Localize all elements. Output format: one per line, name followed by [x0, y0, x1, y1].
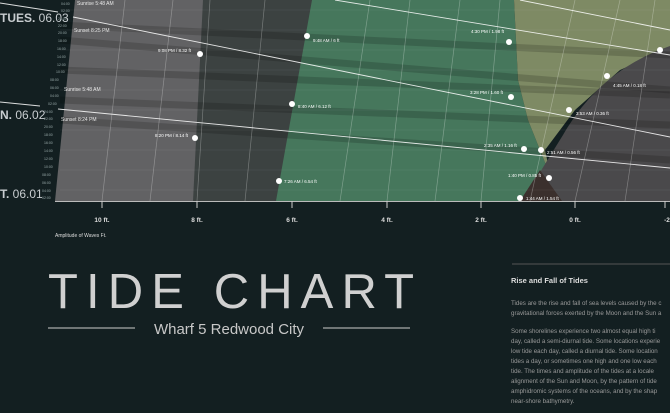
sunrise/sunset labels: Sunrise 5:48 AM — [64, 87, 101, 93]
tide points: 8:40 AM / 6.12 ft — [298, 104, 332, 109]
text panel: rise and fall of tides — [511, 264, 670, 405]
hour labels: 18:00 — [58, 39, 67, 43]
hour labels: 16:00 — [44, 141, 53, 145]
hour labels — [42, 2, 70, 200]
sunrise/sunset labels: Sunrise 5:48 AM — [77, 1, 114, 7]
hour labels: 12:00 — [44, 157, 53, 161]
left date column: N. 06.02 — [0, 108, 46, 122]
hour labels: 12:00 — [57, 63, 66, 67]
tide points — [155, 29, 663, 201]
x axis: -2 — [664, 217, 670, 224]
x axis: 4 ft. — [381, 217, 393, 224]
hour labels: 04:00 — [42, 189, 51, 193]
tide points: 9:08 PM / 8.32 ft — [158, 48, 192, 53]
text panel: rise and fall of tides: tides a day, or sometimes one high and one low each — [511, 358, 657, 365]
left date column: T. 06.01 — [0, 187, 43, 201]
text panel: rise and fall of tides: amphidromic systems of the oceans, and by the shap — [511, 388, 658, 395]
hour labels: 08:00 — [50, 78, 59, 82]
text panel: rise and fall of tides: alignment of the Sun and Moon, by the pattern of tide — [511, 378, 657, 385]
tide points: 1:40 PM / 0.85 ft — [508, 173, 542, 178]
hour labels: 08:00 — [42, 173, 51, 177]
text panel: rise and fall of tides: low tide each day, called a diurnal tide. Some location — [511, 348, 658, 355]
hour labels: 16:00 — [57, 47, 66, 51]
hour labels: 06:00 — [50, 86, 59, 90]
hour labels: 22:00 — [58, 24, 67, 28]
x axis: 10 ft. — [94, 217, 110, 224]
hour labels: 24:00 — [58, 17, 67, 21]
left date column — [0, 11, 69, 201]
tide points: 2:51 AM / 0.56 ft — [547, 150, 581, 155]
text panel: rise and fall of tides: Rise and Fall of Tides — [511, 276, 588, 285]
tide points: 3:53 AM / 0.36 ft — [576, 111, 610, 116]
hour labels: 10:00 — [44, 165, 53, 169]
chart regions — [55, 0, 670, 201]
title: TIDE CHART — [48, 265, 414, 319]
hour labels: 20:00 — [58, 31, 67, 35]
hour labels: 24:00 — [44, 110, 53, 114]
sunrise/sunset labels: Sunset 8:24 PM — [61, 117, 97, 123]
hour labels: 14:00 — [44, 149, 53, 153]
hour labels: 02:00 — [61, 9, 70, 13]
tide points: 1:44 AM / 1.54 ft — [526, 196, 560, 201]
text panel: rise and fall of tides: tide. The times and amplitude of the tides at a locale — [511, 368, 655, 375]
x axis: 0 ft. — [569, 217, 581, 224]
hour labels: 06:00 — [42, 181, 51, 185]
hour labels: 02:00 — [48, 102, 57, 106]
tide points: 8:20 PM / 8.14 ft — [155, 133, 189, 138]
hour labels: 14:00 — [57, 55, 66, 59]
hour labels: 02:00 — [42, 196, 51, 200]
x axis: 6 ft. — [286, 217, 298, 224]
hour labels: 18:00 — [44, 133, 53, 137]
text panel: rise and fall of tides: gravitational forces exerted by the Moon and the Sun a — [511, 310, 662, 317]
hour labels: 22:00 — [44, 117, 53, 121]
tide points: 9:48 AM / 6 ft — [313, 38, 340, 43]
title: Wharf 5 Redwood City — [154, 321, 305, 338]
x axis: 8 ft. — [191, 217, 203, 224]
tide points: 3:28 PM / 1.60 ft — [470, 90, 504, 95]
tide points: 2:35 AM / 1.16 ft — [484, 143, 518, 148]
sunrise/sunset labels — [61, 1, 114, 123]
x axis: 2 ft. — [475, 217, 487, 224]
day divider lines — [0, 0, 670, 168]
left date column: TUES. 06.03 — [0, 11, 69, 25]
tide points: 4:30 PM / 1.98 ft — [471, 29, 505, 34]
x axis: Amplitude of Waves Ft. — [55, 233, 106, 239]
hour labels: 10:00 — [56, 70, 65, 74]
sunrise/sunset labels: Sunset 8:25 PM — [74, 28, 110, 34]
hour labels: 04:00 — [50, 94, 59, 98]
text panel: rise and fall of tides: near-shore bathymetry. — [511, 398, 575, 405]
x axis — [55, 201, 670, 239]
tide points: 7:26 AM / 6.54 ft — [284, 179, 318, 184]
text panel: rise and fall of tides: day, called a semi-diurnal tide. Some locations experie — [511, 338, 661, 345]
hour labels: 20:00 — [44, 125, 53, 129]
tide points: 4:45 AM / 0.18 ft — [613, 83, 647, 88]
text panel: rise and fall of tides: Some shorelines experience two almost equal high ti — [511, 328, 655, 335]
text panel: rise and fall of tides: Tides are the rise and fall of sea levels caused by the c — [511, 300, 661, 307]
hour labels: 04:00 — [61, 2, 70, 6]
